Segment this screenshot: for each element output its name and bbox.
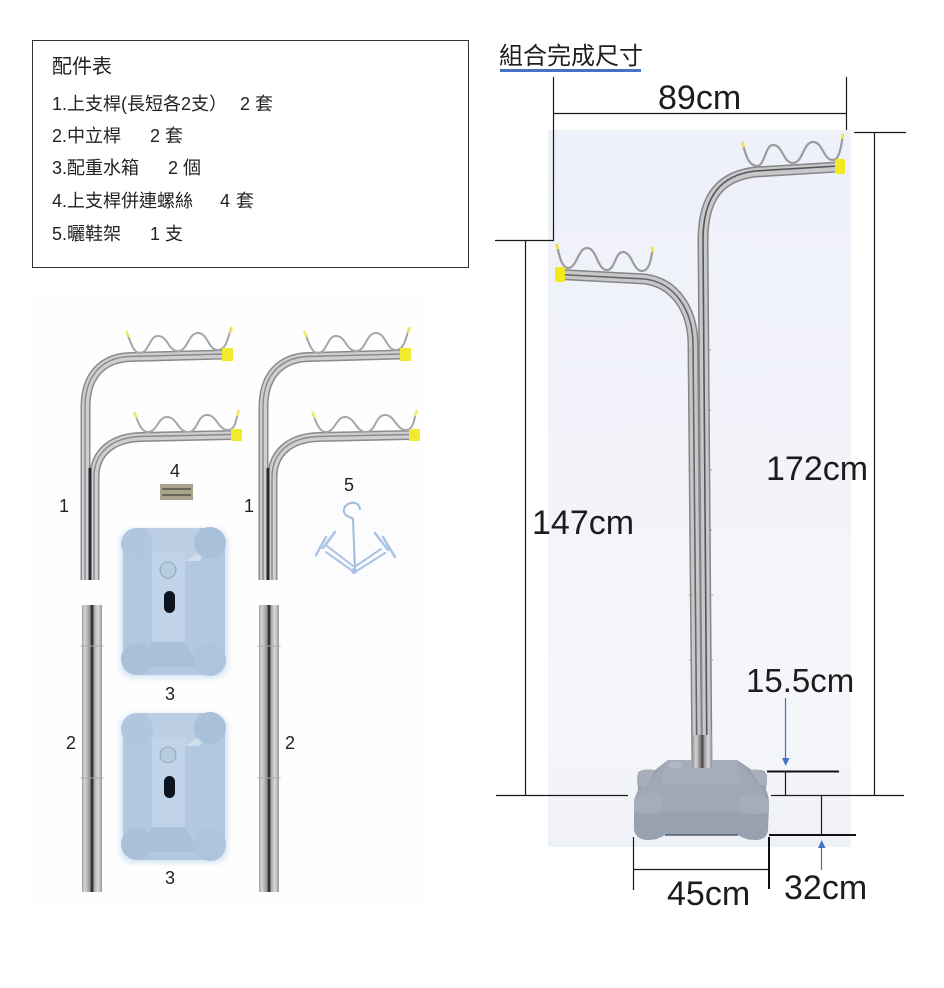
- dimension: 15.5cm base height: 15.5cm: [746, 662, 854, 699]
- long arm tube: [703, 166, 838, 770]
- assembled rack: [555, 134, 845, 840]
- dimension: 15.5cm base height: [746, 662, 854, 795]
- item 1: 2: [240, 94, 250, 114]
- part 5 shoe rack hanger: [316, 503, 395, 574]
- dimension: 45cm base width: [633, 837, 769, 913]
- number labels: [59, 461, 354, 888]
- arrow: down to 15.5cm line: [782, 698, 790, 766]
- dimension: 172cm height: 172cm: [766, 450, 868, 488]
- number labels: 3: [165, 868, 175, 888]
- dimension: 45cm base width: 45cm: [667, 875, 750, 913]
- panel: assembled product photo background: [548, 130, 851, 847]
- dimension: 32cm base depth: [769, 795, 867, 907]
- dimension: 147cm height: [496, 240, 634, 796]
- baseline right: [771, 794, 904, 796]
- part 3 water tank, upper: [120, 527, 228, 678]
- parts photo background: [30, 296, 423, 908]
- item 3: 2: [168, 158, 178, 178]
- number labels: 4: [170, 461, 180, 481]
- dimension: 89cm width: [495, 77, 846, 240]
- part 4 connecting plate: [160, 484, 193, 500]
- grey weighted base: [634, 735, 769, 840]
- dimension: 32cm base depth: 32cm: [784, 869, 867, 907]
- part 1 upper rods, right set: [263, 327, 420, 580]
- arrow: up to 32cm line: [818, 840, 826, 870]
- number labels: 2: [66, 733, 76, 753]
- item 4: 4.上支桿併連螺絲: [52, 191, 193, 211]
- panel: parts list: [32, 40, 468, 268]
- item 2: 套: [165, 126, 183, 146]
- number labels: 1: [244, 496, 254, 516]
- dimension: 147cm height: 147cm: [532, 504, 634, 542]
- dimension: 172cm height: [766, 132, 906, 795]
- item 3: 3.配重水箱: [52, 158, 139, 178]
- part 5 shoe rack background: [310, 478, 400, 601]
- part 3 water tank, lower: [120, 712, 228, 863]
- part 2 middle rods, right: [258, 605, 280, 892]
- parts list heading: 配件表: [52, 55, 112, 78]
- item 3: 個: [183, 158, 201, 178]
- wire shoe holders: [557, 135, 843, 271]
- item 5: 支: [165, 224, 183, 244]
- pole fasteners: [688, 350, 713, 660]
- item 4: 4: [220, 191, 230, 211]
- assembled size heading: 組合完成尺寸: [499, 43, 643, 70]
- item 1: 1.上支桿(長短各2支）: [52, 94, 227, 114]
- yellow wire tips: [556, 134, 843, 252]
- part 2 middle rods, left: [80, 605, 104, 892]
- yellow end caps: [555, 159, 845, 282]
- item 5: 1: [150, 224, 160, 244]
- item 5: 5.曬鞋架: [52, 224, 121, 244]
- number labels: 3: [165, 684, 175, 704]
- number labels: 5: [344, 475, 354, 495]
- item 2: 2.中立桿: [52, 126, 121, 146]
- number labels: 2: [285, 733, 295, 753]
- item 2: 2: [150, 126, 160, 146]
- dimension: 89cm width: 89cm: [658, 79, 741, 117]
- item 1: 套: [255, 94, 273, 114]
- short arm tube: [560, 274, 697, 770]
- item 4: 套: [236, 191, 254, 211]
- part 1 upper rods, left set: [85, 327, 242, 580]
- number labels: 1: [59, 496, 69, 516]
